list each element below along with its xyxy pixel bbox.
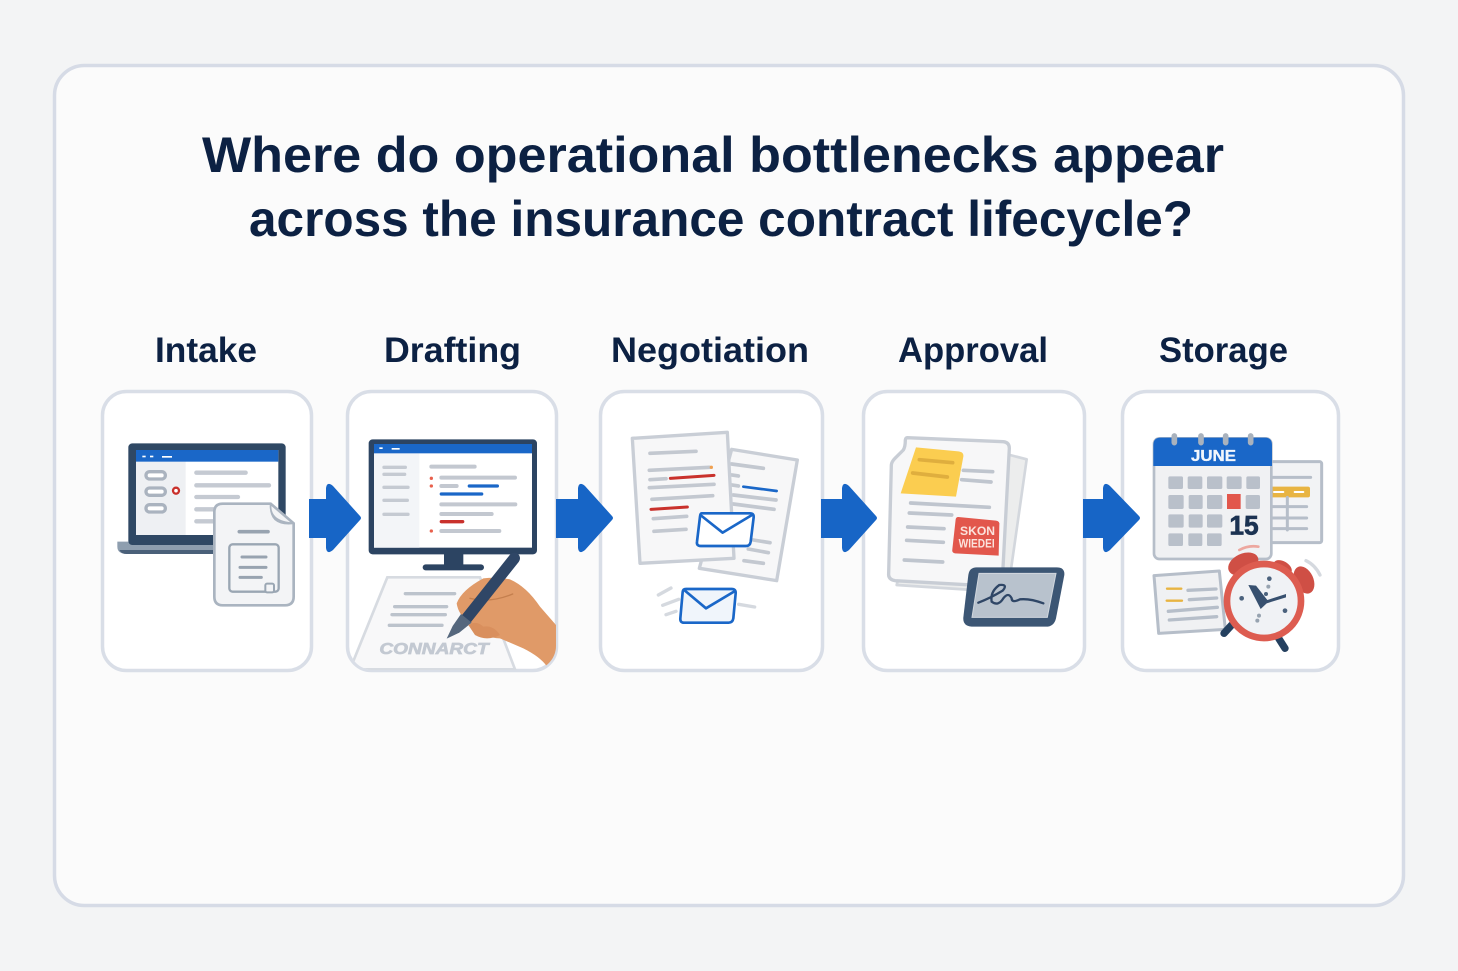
icon: calendar with alarm clock: JUNE: [1191, 448, 1236, 465]
arrow: intake to drafting: [309, 484, 361, 552]
title: across the insurance contract lifecycle?: [249, 191, 1193, 247]
panel: Intake: [102, 392, 312, 670]
title: Where do operational bottlenecks appear: [202, 127, 1224, 183]
panel: Storage: [1122, 392, 1338, 670]
icon: document with sticky note, stamp and signature: WIEDEI: [959, 536, 995, 550]
icon: document with sticky note, stamp and signature: SKON: [960, 524, 995, 538]
arrow: drafting to negotiation: [556, 484, 613, 552]
panel: Drafting: [348, 392, 556, 670]
heading: Intake: Intake: [155, 331, 257, 370]
title: [202, 127, 1224, 247]
icon: monitor and signing hand: CONNARCT: [379, 641, 490, 658]
icon: documents and envelopes: [632, 432, 797, 623]
icon: document with sticky note, stamp and signature: [889, 438, 1064, 627]
arrow: negotiation to approval: [821, 484, 877, 552]
panel: Approval: [864, 392, 1084, 670]
icon: calendar with alarm clock: 15: [1229, 510, 1259, 540]
heading: Storage: Storage: [1159, 331, 1288, 370]
panel: Negotiation: [600, 392, 822, 670]
icon: calendar with alarm clock: [1153, 436, 1322, 648]
heading: Negotiation: Negotiation: [611, 331, 809, 370]
arrow: approval to storage: [1083, 484, 1140, 552]
heading: Drafting: Drafting: [384, 331, 521, 370]
icon: monitor and signing hand: [350, 439, 556, 669]
icon: laptop with document: [117, 443, 294, 605]
heading: Approval: Approval: [898, 331, 1048, 370]
